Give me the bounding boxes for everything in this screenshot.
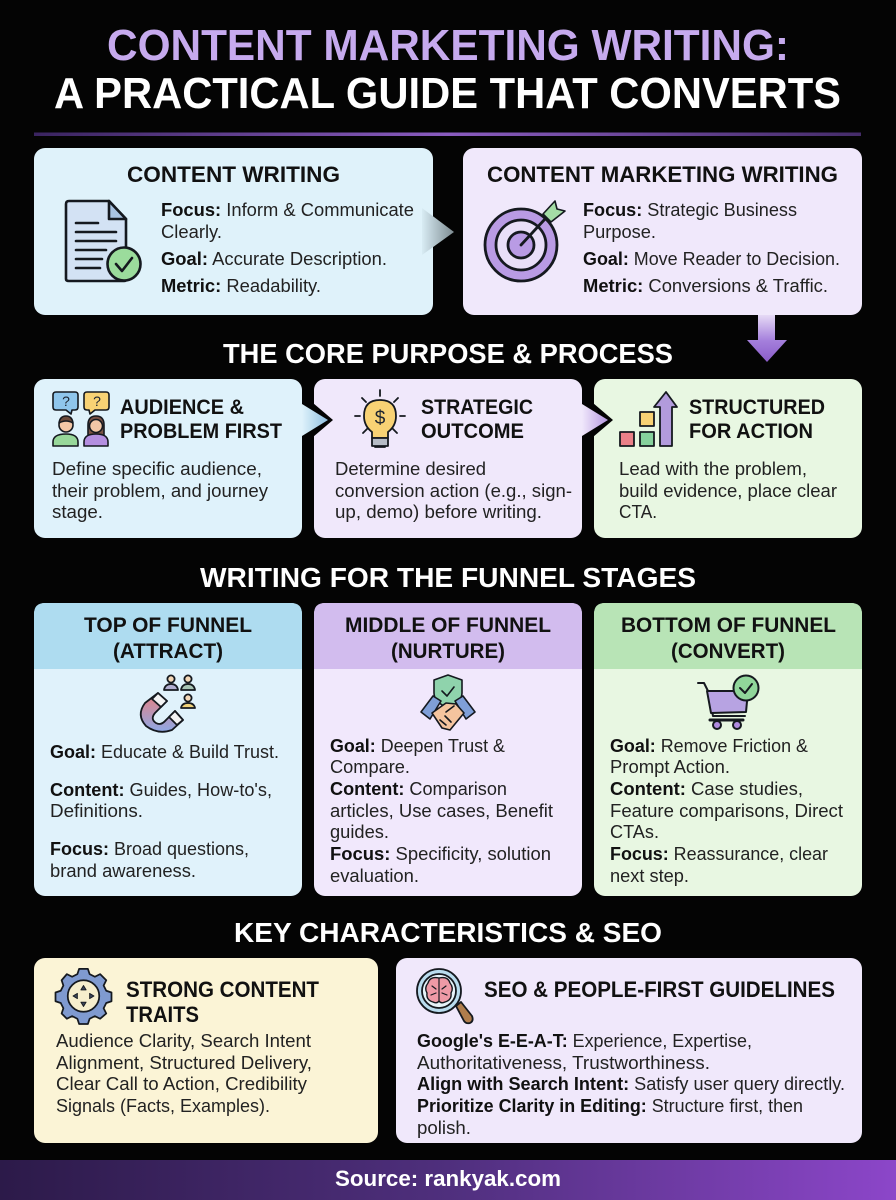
heading: structured for action: FOR ACTION [689,420,813,443]
text: dollar sign: $ [375,408,386,429]
heading: strong content traits [126,977,320,1027]
text: strategic description: conversion action (e.g., sign- [335,480,572,501]
text: bottom of funnel details: Focus: Reassurance, clear [610,843,828,864]
heading: key characteristics and seo: KEY CHARACTERISTICS & SEO [234,917,662,948]
heading: audience and problem first: PROBLEM FIRST [120,420,282,443]
text: content marketing writing details: Goal: Move Reader to Decision. [583,248,840,269]
panel: strategic outcome [314,379,582,538]
text: seo guidelines list: Authoritativeness, Trustworthiness. [417,1052,710,1073]
text: traits list: Clear Call to Action, Credibility [56,1073,308,1094]
text: content writing details: Goal: Accurate Description. [161,248,387,269]
text: question marks: ? [62,393,70,409]
text: structured description: CTA. [619,501,657,522]
text: structured description [619,458,837,522]
text: traits list: Signals (Facts, Examples). [56,1095,270,1116]
heading: core purpose and process: THE CORE PURPOSE & PROCESS [223,338,673,369]
text: content marketing writing details [583,199,840,296]
panel: audience and problem first [34,379,302,538]
heading: top of funnel: TOP OF FUNNEL [84,614,252,637]
text: bottom of funnel details: Prompt Action. [610,756,730,777]
text: seo guidelines list: polish. [417,1117,471,1138]
icon: gear with arrows [56,969,112,1024]
text: seo guidelines list: Align with Search Intent: Satisfy user query directly. [417,1073,845,1094]
title [54,21,841,118]
text: content marketing writing details: Purpose. [583,221,656,242]
text: traits list: Alignment, Structured Delivery, [56,1052,312,1073]
text: strategic description: up, demo) before writing. [335,501,542,522]
text: middle of funnel details: Content: Comparison [330,778,507,799]
text: strategic description: Determine desired [335,458,486,479]
panel: strong content traits [34,958,378,1143]
arrow: audience to outcome [302,398,333,442]
text: bottom of funnel details: CTAs. [610,821,659,842]
text: question marks [62,393,101,409]
title: A PRACTICAL GUIDE THAT CONVERTS [54,69,841,118]
heading: structured for action [689,396,825,443]
panel: content marketing writing [463,148,862,315]
heading: bottom of funnel [621,614,836,663]
icon: magnifier with brain [417,969,473,1023]
text: top of funnel details: Goal: Educate & Build Trust. [50,741,279,762]
text: middle of funnel details: guides. [330,821,389,842]
text: middle of funnel details [330,735,553,886]
heading: content marketing writing: CONTENT MARKETING WRITING [487,162,838,187]
icon: blocks and up arrow [620,392,677,446]
panel: content writing [34,148,433,315]
text: top of funnel details: Content: Guides, How-to's, [50,779,272,800]
text: content writing details [161,199,414,296]
heading: audience and problem first: AUDIENCE & [120,396,244,419]
text: content marketing writing details: Focus: Strategic Business [583,199,797,220]
heading: funnel stages: WRITING FOR THE FUNNEL STAGES [200,562,696,593]
text: top of funnel details: Definitions. [50,800,143,821]
text: middle of funnel details: Focus: Specificity, solution [330,843,551,864]
heading: strategic outcome: OUTCOME [421,420,524,443]
text: content marketing writing details: Metric: Conversions & Traffic. [583,275,828,296]
text: structured description: Lead with the problem, [619,458,807,479]
text: question marks: ? [93,393,101,409]
heading: audience and problem first [120,396,282,443]
heading: strategic outcome [421,396,533,443]
heading: top of funnel [84,614,252,663]
text: seo guidelines list: Google's E-E-A-T: Experience, Expertise, [417,1030,752,1051]
heading: middle of funnel [345,614,551,663]
panel: structured for action [594,379,862,538]
text: bottom of funnel details: Content: Case studies, [610,778,803,799]
heading: top of funnel: (ATTRACT) [113,640,223,663]
text: middle of funnel details: Compare. [330,756,410,777]
heading: structured for action: STRUCTURED [689,396,825,419]
icon: light bulb with dollar [355,390,405,447]
icon: shield and handshake [421,675,475,730]
text: audience description [52,458,269,522]
text: content writing details: Focus: Inform & Communicate [161,199,414,220]
title: CONTENT MARKETING WRITING: [107,21,789,70]
text: top of funnel details: brand awareness. [50,860,196,881]
text: middle of funnel details: articles, Use cases, Benefit [330,800,553,821]
text: middle of funnel details: evaluation. [330,865,419,886]
heading: seo guidelines: SEO & PEOPLE-FIRST GUIDELINES [484,977,835,1002]
text: audience description: stage. [52,501,103,522]
panel: middle of funnel [314,603,582,896]
text: traits list: Audience Clarity, Search Intent [56,1030,311,1051]
arrow: outcome to structure [582,398,613,442]
text: structured description: build evidence, place clear [619,480,837,501]
heading: middle of funnel: (NURTURE) [391,640,505,663]
panel: seo and people-first guidelines [396,958,862,1143]
text: audience description: their problem, and journey [52,480,269,501]
panel: top of funnel [34,603,302,896]
text: seo guidelines list: Prioritize Clarity in Editing: Structure first, then [417,1095,803,1116]
footer: source: Source: rankyak.com [335,1166,561,1191]
panel: bottom of funnel [594,603,862,896]
text: bottom of funnel details [610,735,843,886]
arrow: down to core purpose [747,315,787,362]
text: bottom of funnel details: Feature comparisons, Direct [610,800,843,821]
text: top of funnel details [50,741,279,881]
text: traits list [56,1030,312,1116]
heading: content writing: CONTENT WRITING [127,162,340,187]
icon: target with arrow [485,201,565,281]
text: audience description: Define specific audience, [52,458,262,479]
arrow: content writing to marketing writing [422,208,454,255]
heading: strategic outcome: STRATEGIC [421,396,533,419]
text: content writing details: Clearly. [161,221,222,242]
footer: source [0,1160,896,1200]
text: bottom of funnel details: Goal: Remove Friction & [610,735,809,756]
heading: strong content traits: STRONG CONTENT [126,977,320,1002]
icon: shopping cart with check [698,676,758,729]
heading: middle of funnel: MIDDLE OF FUNNEL [345,614,551,637]
text: content writing details: Metric: Readability. [161,275,321,296]
icon: audience with questions [53,392,109,446]
icon: magnet attracting people [141,675,195,732]
icon: document with check [66,201,140,281]
heading: bottom of funnel: BOTTOM OF FUNNEL [621,614,836,637]
text: middle of funnel details: Goal: Deepen Trust & [330,735,506,756]
text: bottom of funnel details: next step. [610,865,689,886]
text: seo guidelines list [417,1030,845,1138]
heading: strong content traits: TRAITS [126,1002,199,1027]
heading: bottom of funnel: (CONVERT) [671,640,785,663]
text: top of funnel details: Focus: Broad questions, [50,838,249,859]
text: strategic description [335,458,572,522]
